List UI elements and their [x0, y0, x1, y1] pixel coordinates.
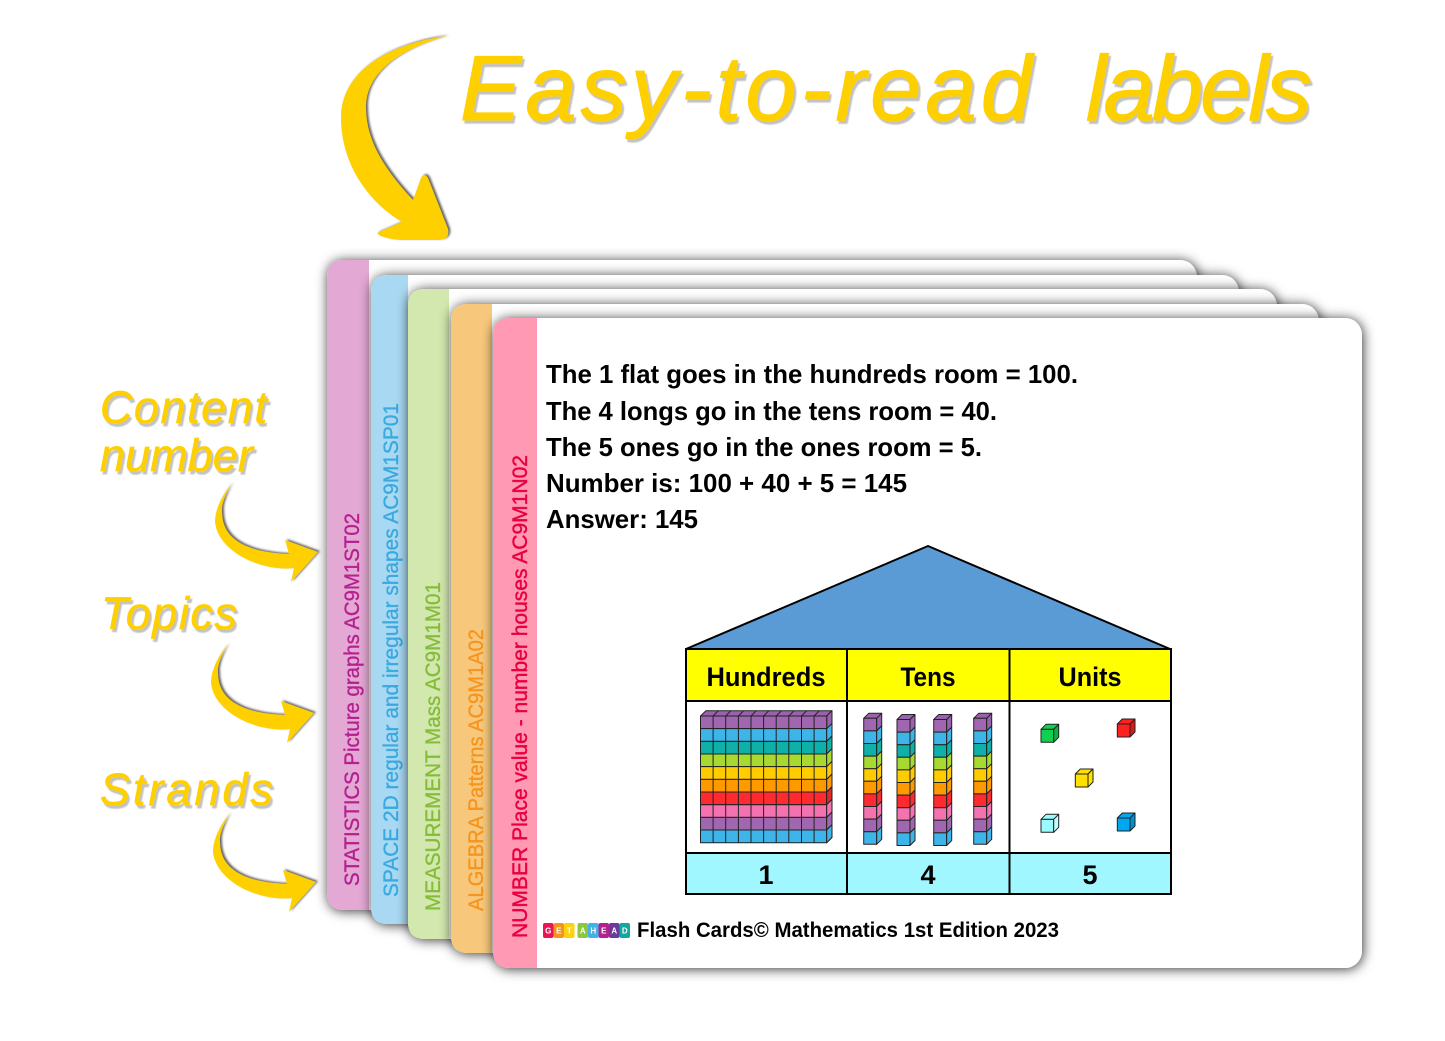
footer: Get Ahead logo: D [622, 926, 628, 936]
unit cubes [1041, 719, 1135, 832]
card: number (front) [493, 318, 1362, 968]
label: Strands: Strands [100, 764, 273, 815]
table: 4 [920, 860, 936, 890]
text block: explanation: The 4 longs go in the tens room = 40. [546, 396, 997, 426]
footer: Get Ahead logo: H [590, 926, 596, 936]
footer: edition text: Flash Cards© Mathematics 1st Edition 2023 [637, 919, 1059, 942]
hundreds flat block [700, 711, 832, 843]
card: statistics: STATISTICS Picture graphs AC9M1ST02 [341, 513, 364, 886]
arrow: large curved arrow pointing to cards [341, 36, 448, 240]
card: algebra [451, 304, 1319, 953]
table: Tens [900, 662, 956, 692]
label: Content number: Content [100, 382, 269, 433]
table: 5 [1082, 860, 1098, 890]
arrow: to content number [215, 483, 318, 582]
card: statistics [327, 260, 1197, 910]
number house diagram [686, 546, 1171, 894]
footer: Get Ahead logo: A [580, 926, 586, 936]
footer: Get Ahead logo: G [545, 926, 551, 936]
footer: Get Ahead logo: E [556, 926, 562, 936]
label: Topics: Topics [101, 588, 237, 639]
tens long blocks [864, 713, 992, 846]
title: Easy-to-read labels: labels [1086, 38, 1312, 140]
card: measurement: MEASUREMENT Mass AC9M1M01 [422, 582, 445, 911]
card: space [371, 275, 1239, 924]
card: number (front): NUMBER Place value - number houses AC9M1N02 [509, 455, 532, 938]
title: Easy-to-read labels: Easy-to-read [460, 38, 1035, 140]
footer: Get Ahead logo: A [611, 926, 617, 936]
text block: explanation [546, 359, 1078, 534]
text block: explanation: Number is: 100 + 40 + 5 = 145 [546, 468, 907, 498]
arrow: to topics [211, 644, 314, 743]
table: 1 [758, 860, 774, 890]
label: Content number [100, 382, 269, 481]
house roof [686, 546, 1170, 649]
text block: explanation: The 1 flat goes in the hundreds room = 100. [546, 359, 1078, 389]
table: Hundreds [706, 662, 826, 692]
label: Content number: number [100, 430, 255, 481]
footer: Get Ahead logo: E [601, 926, 607, 936]
card: space: SPACE 2D regular and irregular shapes AC9M1SP01 [380, 403, 403, 897]
card: algebra: ALGEBRA Patterns AC9M1A02 [465, 629, 488, 911]
title: Easy-to-read labels [460, 38, 1312, 140]
arrow: to strands [213, 813, 316, 912]
text block: explanation: The 5 ones go in the ones room = 5. [546, 432, 982, 462]
table: Units [1058, 662, 1122, 692]
card: measurement [408, 289, 1277, 939]
table [686, 649, 1171, 894]
text block: explanation: Answer: 145 [546, 504, 698, 534]
footer: Get Ahead logo: T [567, 926, 572, 936]
footer: Get Ahead logo [543, 923, 630, 938]
